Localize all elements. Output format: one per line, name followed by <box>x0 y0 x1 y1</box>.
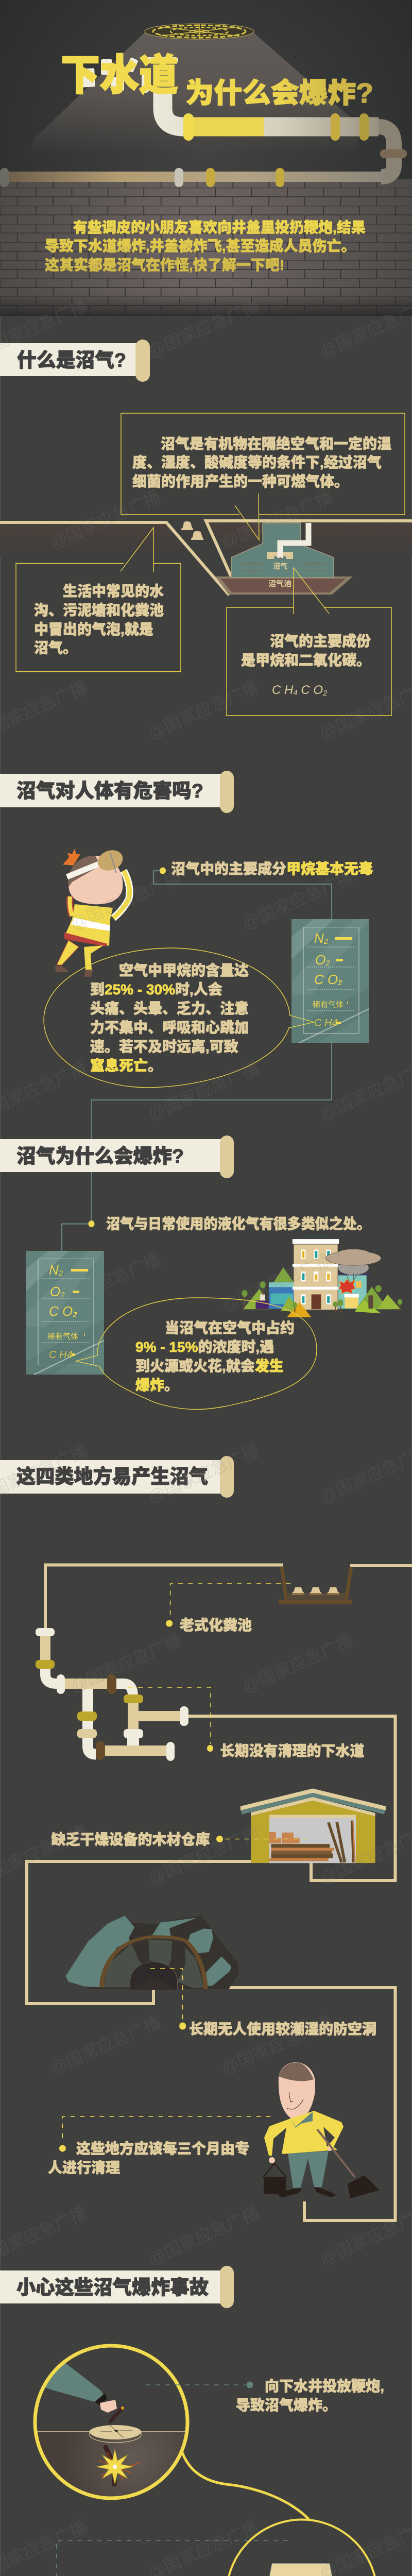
intro text: 这其实都是沼气在作怪,快了解一下吧! <box>45 257 284 273</box>
title <box>61 52 373 109</box>
chart: air composition board: 稀有气体 <box>313 1001 344 1009</box>
watermarks: @国家应急广播 <box>218 1249 335 1315</box>
icon: stones <box>181 521 203 540</box>
watermarks: @国家应急广播 <box>47 487 164 552</box>
heading: 沼气为什么会爆炸: 沼气为什么会爆炸? <box>16 1146 184 1167</box>
diagram: biogas digester <box>0 521 412 595</box>
title: 为什么会爆炸? <box>185 78 373 109</box>
big pipe <box>0 88 407 187</box>
callout: everyday examples: 中冒出的气泡,就是 <box>34 621 153 637</box>
title: 下水道 <box>61 52 178 99</box>
intro text: 导致下水道爆炸,井盖被炸飞,甚至造成人员伤亡。 <box>45 238 356 254</box>
chart: air composition board: C O <box>314 972 338 987</box>
panel: public toilet <box>221 2519 386 2576</box>
intro text <box>45 219 366 273</box>
heading: 沼气为什么会爆炸 <box>0 1136 234 1178</box>
route lines <box>27 1565 412 2221</box>
chart: air composition board 2: 2 <box>72 1310 77 1319</box>
watermarks: @国家应急广播 <box>239 868 356 933</box>
callout: everyday examples: 沟、污泥塘和化粪池 <box>34 602 164 618</box>
heading: 这四类地方易产生沼气: 这四类地方易产生沼气 <box>16 1466 208 1488</box>
speech bubble: explosion limit: 到火源或火花,就会发生 <box>135 1358 284 1374</box>
illustration: air raid shelter <box>66 1916 238 1990</box>
heading: 什么是沼气: 什么是沼气? <box>17 350 126 371</box>
label: timber warehouse: 缺乏干燥设备的木材仓库 <box>52 1832 210 1848</box>
illustration: cleaner with shovel and bucket <box>263 2062 380 2198</box>
speech bubble: methane effects: 力不集中、呼吸和心跳加 <box>90 1020 249 1036</box>
callout: composition: 是甲烷和二氧化碳。 <box>241 652 371 668</box>
heading: 沼气对人体有危害吗 <box>0 771 234 813</box>
speech bubble: explosion limit: 当沼气在空气中占约 <box>165 1319 295 1336</box>
callout: composition: 4 <box>293 688 298 697</box>
callout: everyday examples: 沼气。 <box>34 640 77 656</box>
callout: everyday examples: 生活中常见的水 <box>63 583 164 599</box>
chart: air composition board: O <box>315 952 325 968</box>
watermarks: @国家应急广播 <box>218 487 335 552</box>
light cone <box>31 32 360 155</box>
callout: definition: 沼气是有机物在隔绝空气和一定的温 <box>161 435 391 452</box>
callout: definition: 度、湿度、酸碱度等的条件下,经过沼气 <box>132 454 382 470</box>
label: uncleaned sewer <box>128 1687 365 1759</box>
text: firecracker: 向下水井投放鞭炮, <box>265 2378 384 2394</box>
watermarks: @国家应急广播 <box>145 296 262 361</box>
chart: air composition board: N <box>314 930 324 946</box>
chart: air composition board 2: N <box>49 1262 59 1278</box>
callout: composition: 沼气的主要成份 <box>270 633 371 649</box>
connector curve <box>182 2451 309 2519</box>
chart: air composition board: 2 <box>323 937 329 946</box>
text: clean every three months: 这些地方应该每三个月由专 <box>76 2140 249 2157</box>
text: toilet <box>44 2540 288 2576</box>
callout: composition: C O <box>298 683 323 697</box>
illustration: septic pit <box>279 1567 352 1604</box>
speech bubble: explosion limit <box>76 1298 317 1410</box>
heading: 沼气对人体有危害吗: 沼气对人体有危害吗? <box>16 781 203 802</box>
chart: air composition board 2: 2 <box>58 1269 63 1278</box>
text: clean every three months: 人进行清理 <box>48 2160 120 2176</box>
speech bubble: methane effects: 空气中甲烷的含量达 <box>119 962 249 978</box>
callout: definition <box>121 413 405 540</box>
panel: firecracker in manhole <box>31 2346 196 2504</box>
brick wall <box>0 178 412 316</box>
callout: composition: 2 <box>322 689 328 698</box>
illustration: sewer pipes <box>36 1628 188 1761</box>
icon: manhole cover <box>145 24 254 39</box>
chart: air composition board 2: O <box>50 1284 60 1299</box>
label: shelter: 长期无人使用较潮湿的防空洞 <box>189 2021 376 2037</box>
speech bubble: methane effects: 窒息死亡。 <box>90 1057 162 1074</box>
speech bubble: methane effects <box>44 948 314 1088</box>
speech bubble: methane effects: 头痛、头晕、乏力、注意 <box>90 1000 249 1016</box>
chart: air composition board 2: C O <box>49 1303 73 1319</box>
heading: 什么是沼气 <box>0 340 150 382</box>
speech bubble: methane effects: 到25% - 30%时,人会 <box>90 981 222 997</box>
chart: air composition board 2: 2 <box>60 1291 65 1299</box>
watermarks: @国家应急广播 <box>67 868 184 933</box>
callout: composition: C H <box>272 683 293 697</box>
icon: explosion <box>96 2449 140 2484</box>
watermarks: @国家应急广播 <box>67 1631 184 1696</box>
label: timber warehouse <box>52 1832 309 1848</box>
chart: air composition board: 2 <box>325 959 330 968</box>
connector line <box>62 871 332 1251</box>
watermarks: @国家应急广播 <box>145 1822 262 1888</box>
panel: hero sewer scene <box>0 0 412 316</box>
watermarks: @国家应急广播 <box>47 2012 164 2078</box>
watermarks: @国家应急广播 <box>145 2203 262 2268</box>
text: clean every three months <box>48 2116 271 2176</box>
watermarks: @国家应急广播 <box>47 1249 164 1315</box>
callout: everyday examples <box>16 528 181 672</box>
pool: 沼气池 <box>268 579 291 588</box>
callout: definition: 细菌的作用产生的一种可燃气体。 <box>132 473 349 489</box>
tank: 沼气 <box>273 562 287 570</box>
intro text: 有些调皮的小朋友喜欢向井盖里投扔鞭炮,结果 <box>73 219 366 235</box>
text: methane non-toxic: 沼气中的主要成分甲烷基本无毒 <box>171 860 373 877</box>
icon: toilet building <box>267 2564 334 2576</box>
chart: air composition board <box>291 919 369 1043</box>
heading: 这四类地方易产生沼气 <box>0 1456 234 1498</box>
watermarks: @国家应急广播 <box>145 1058 262 1124</box>
watermarks: @国家应急广播 <box>239 1631 356 1696</box>
label: septic tank <box>166 1584 290 1633</box>
illustration: timber warehouse <box>241 1788 386 1863</box>
label: uncleaned sewer: 长期没有清理的下水道 <box>220 1742 365 1759</box>
text: similar to LPG: 沼气与日常使用的液化气有很多类似之处。 <box>106 1215 371 1232</box>
label: shelter <box>150 1969 376 2037</box>
chart: air composition board 2: 稀有气体 <box>47 1332 78 1341</box>
chart: air composition board 2: C H4 <box>49 1349 73 1361</box>
chart: air composition board 2 <box>26 1251 104 1375</box>
text: firecracker: 导致沼气爆炸。 <box>236 2397 337 2413</box>
watermarks: @国家应急广播 <box>145 677 262 743</box>
chart: air composition board: 2 <box>337 978 342 987</box>
text: firecracker <box>146 2378 384 2413</box>
chart: air composition board: C H4 <box>314 1018 338 1029</box>
watermarks: @国家应急广播 <box>218 2012 335 2078</box>
illustration: town explosion <box>242 1234 402 1317</box>
speech bubble: methane effects: 速。若不及时远离,可致 <box>90 1038 238 1055</box>
watermarks: @国家应急广播 <box>145 1441 262 1506</box>
callout: composition <box>227 568 391 716</box>
speech bubble: explosion limit: 9% - 15%的浓度时,遇 <box>135 1338 274 1355</box>
pool <box>215 577 353 595</box>
speech bubble: explosion limit: 爆炸。 <box>135 1377 179 1393</box>
tank <box>231 523 334 578</box>
heading: 小心这些沼气爆炸事故 <box>0 2266 234 2308</box>
label: septic tank: 老式化粪池 <box>180 1617 252 1633</box>
heading: 小心这些沼气爆炸事故: 小心这些沼气爆炸事故 <box>16 2277 209 2299</box>
illustration: dizzy man <box>55 847 130 977</box>
